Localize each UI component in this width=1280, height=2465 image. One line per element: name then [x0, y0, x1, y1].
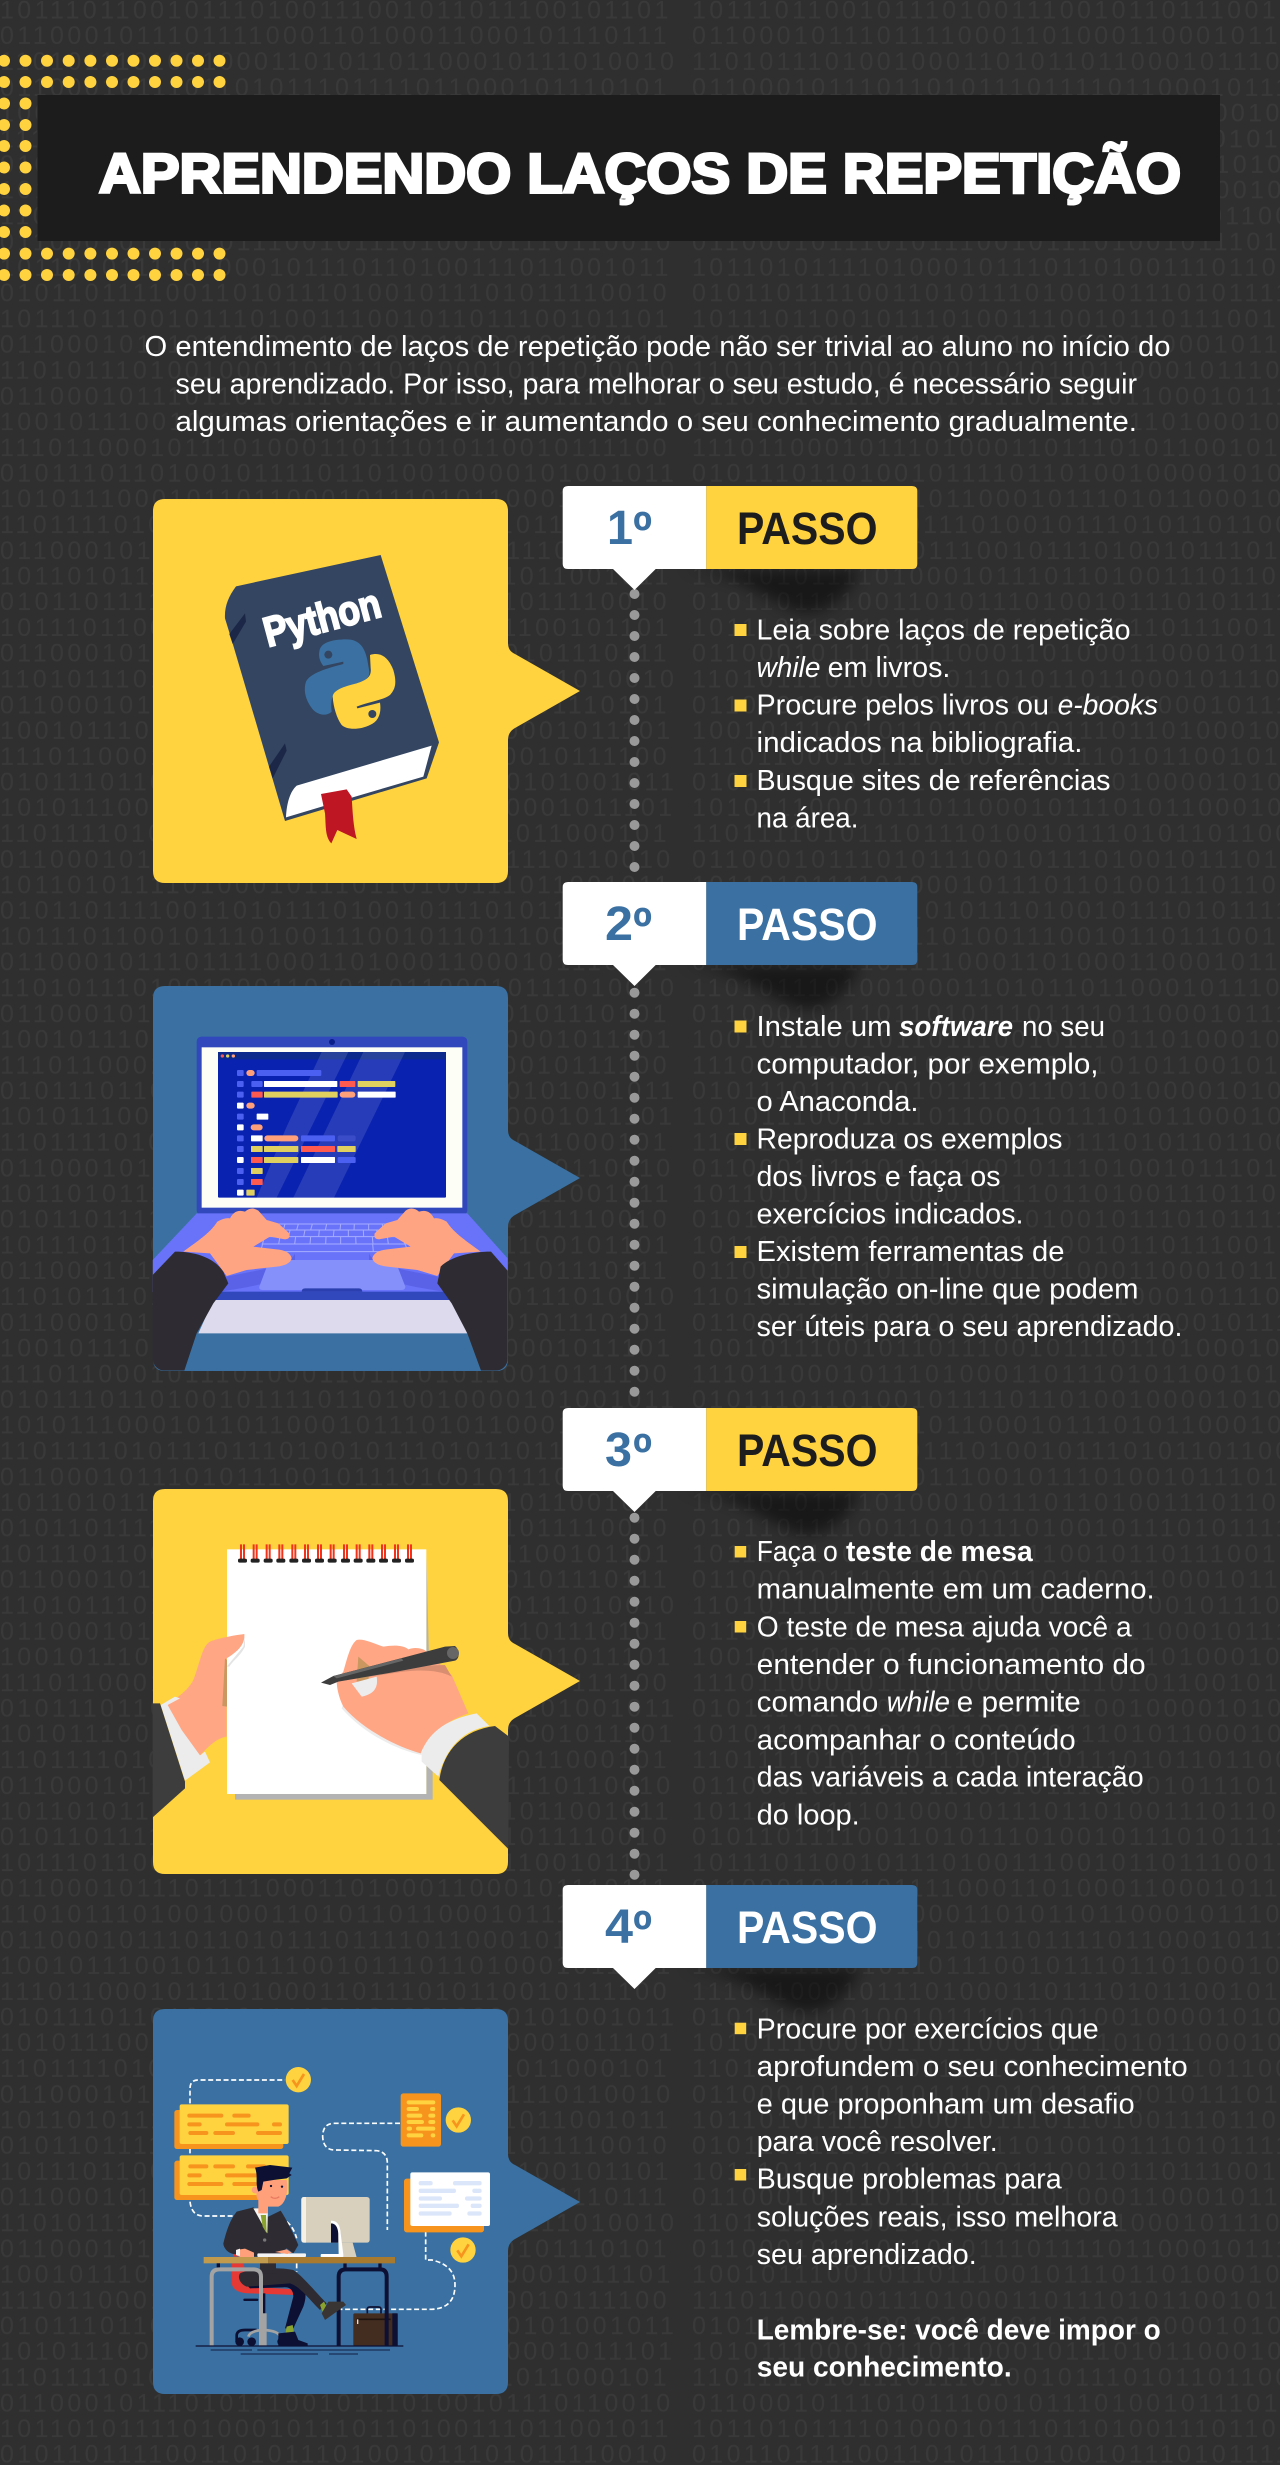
- text block: step 3: while: [887, 1687, 950, 1719]
- text block: step 1: e-books: [1058, 690, 1158, 722]
- text block: step 4: Busque problemas para: [757, 2164, 1062, 2196]
- step label: PASSO: [737, 503, 878, 554]
- text block: step 3: Faça o: [757, 1536, 838, 1568]
- text block: step 4: aprofundem o seu conhecimento: [757, 2051, 1188, 2083]
- panel: step 4 illustration: [153, 2009, 580, 2394]
- text block: step 2: computador, por exemplo,: [756, 1048, 1098, 1080]
- text block: step 2: Reproduza os exemplos: [756, 1124, 1062, 1156]
- text block: step 2: software: [899, 1011, 1013, 1043]
- text block: step 2: Existem ferramentas de: [756, 1236, 1064, 1268]
- text block: step 1: na área.: [756, 802, 858, 834]
- intro paragraph: O entendimento de laços de repetição pode não ser trivial ao aluno no início do: [144, 331, 1170, 363]
- text block: step 3: das variáveis a cada interação: [757, 1762, 1144, 1794]
- text block: step 3: acompanhar o conteúdo: [757, 1724, 1076, 1756]
- step number: º: [633, 1421, 652, 1484]
- step number: 2: [605, 898, 633, 951]
- intro paragraph: algumas orientações e ir aumentando o seu conhecimento gradualmente.: [176, 406, 1137, 438]
- icon: laptop with hands: [153, 1037, 511, 1371]
- text block: step 4: soluções reais, isso melhora: [757, 2201, 1118, 2233]
- intro paragraph: seu aprendizado. Por isso, para melhorar o seu estudo, é necessário seguir: [176, 368, 1138, 400]
- text block: step 3: entender o funcionamento do: [757, 1649, 1146, 1681]
- text block: step 1: Busque sites de referências: [756, 765, 1110, 797]
- text block: step 1: em livros.: [828, 652, 950, 684]
- icon: python book: Python: [258, 579, 386, 656]
- title banner: [38, 95, 1220, 241]
- text block: step 3: [735, 1536, 1155, 1831]
- step number: 4: [605, 1901, 633, 1954]
- badge shadows: [680, 569, 860, 2012]
- badge: 4º passo: [563, 1885, 917, 1989]
- text block: step 1: [734, 614, 1158, 834]
- text block: step 4: Procure por exercícios que: [757, 2013, 1099, 2045]
- step number: 3: [605, 1424, 632, 1477]
- title: APRENDENDO LAÇOS DE REPETIÇÃO: [99, 142, 1181, 204]
- text block: step 3: comando: [757, 1687, 878, 1719]
- step number: º: [633, 499, 652, 562]
- text block: step 2: o Anaconda.: [756, 1086, 918, 1118]
- text block: step 2: ser úteis para o seu aprendizado.: [756, 1311, 1182, 1343]
- panel: step 1 illustration: [153, 499, 580, 883]
- text block: step 4: seu conhecimento.: [757, 2352, 1012, 2384]
- text block: step 2: exercícios indicados.: [756, 1198, 1024, 1230]
- text block: step 2: no seu: [1022, 1011, 1105, 1043]
- text block: step 1: while: [756, 652, 820, 684]
- icon: man at desk with documents: [174, 2067, 490, 2354]
- text block: step 4: seu aprendizado.: [757, 2239, 977, 2271]
- left hand and sleeve: [153, 1209, 292, 1371]
- step number: º: [633, 1898, 652, 1961]
- badge: 2º passo: [563, 882, 917, 986]
- badge: 3º passo: [563, 1408, 917, 1512]
- icon: notebook and writing hands: [153, 1544, 509, 1849]
- step label: PASSO: [737, 1902, 878, 1953]
- right hand and sleeve: [372, 1209, 511, 1371]
- text block: step 3: teste de mesa: [846, 1536, 1034, 1568]
- text block: step 2: Instale um: [756, 1011, 892, 1043]
- text block: step 2: simulação on-line que podem: [756, 1274, 1138, 1306]
- text block: step 4: para você resolver.: [757, 2126, 998, 2158]
- decorative yellow dot frame: [0, 55, 226, 281]
- text block: step 2: [734, 1011, 1182, 1343]
- text block: step 3: O teste de mesa ajuda você a: [757, 1611, 1132, 1643]
- dotted timeline: [630, 594, 640, 1880]
- text block: step 3: do loop.: [757, 1799, 860, 1831]
- text block: step 4: Lembre-se: você deve impor o: [757, 2314, 1161, 2346]
- text block: step 4: [735, 2013, 1188, 2384]
- badge: 1º passo: [563, 486, 917, 590]
- text block: step 4: e que proponham um desafio: [757, 2088, 1135, 2120]
- icon: python book: [225, 555, 439, 843]
- step label: PASSO: [737, 1425, 878, 1476]
- panel: step 3 illustration: [153, 1489, 580, 1874]
- step label: PASSO: [737, 899, 878, 950]
- text block: step 1: indicados na bibliografia.: [756, 727, 1082, 759]
- text block: step 2: dos livros e faça os: [756, 1161, 1000, 1193]
- intro paragraph: [144, 331, 1170, 438]
- text block: step 3: e permite: [957, 1687, 1081, 1719]
- text block: step 3: manualmente em um caderno.: [757, 1574, 1155, 1606]
- text block: step 1: Leia sobre laços de repetição: [756, 614, 1130, 646]
- panel: step 2 illustration: [153, 986, 580, 1371]
- step number: º: [633, 895, 652, 958]
- text block: step 1: Procure pelos livros ou: [756, 690, 1049, 722]
- step number: 1: [607, 502, 633, 555]
